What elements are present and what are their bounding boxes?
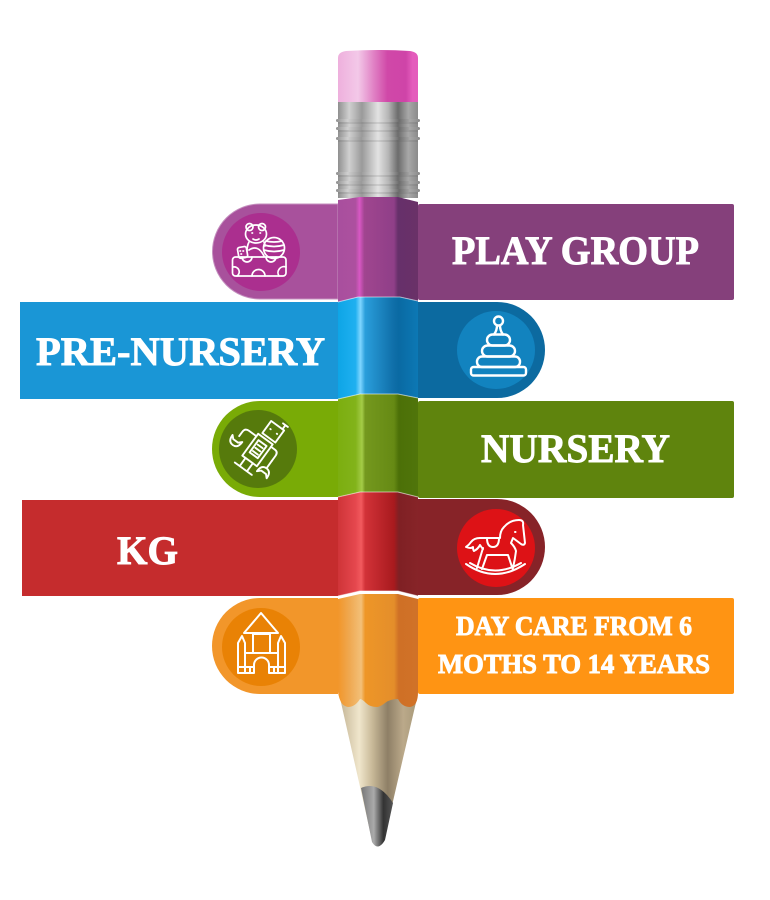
label: nursery: NURSERY — [481, 426, 670, 471]
label: pre-nursery: PRE-NURSERY — [36, 329, 325, 374]
icon: ring stacker — [457, 311, 535, 389]
pencil segment: red — [338, 492, 418, 596]
band: day care — [212, 598, 734, 694]
pencil segment: purple — [338, 197, 418, 302]
icon: toy castle — [222, 608, 300, 686]
pencil segment: orange — [338, 594, 418, 707]
tip wood — [340, 698, 417, 846]
pencil segment: green — [338, 394, 418, 497]
ferrule — [336, 102, 420, 198]
icon: rocking horse — [457, 509, 535, 587]
label: day care: DAY CARE FROM 6 — [456, 611, 692, 641]
pencil — [336, 50, 420, 847]
band: play group — [212, 204, 734, 300]
label: play group: PLAY GROUP — [452, 228, 699, 273]
icon: robot — [219, 403, 298, 488]
label: day care — [438, 611, 710, 679]
band: kg — [22, 499, 545, 596]
label: day care: MOTHS TO 14 YEARS — [438, 649, 710, 679]
band: nursery — [212, 401, 734, 498]
pencil segment: blue — [338, 297, 418, 399]
icon: teddy bear and toys — [222, 213, 300, 291]
label: kg: KG — [117, 528, 178, 573]
tip graphite — [361, 786, 393, 847]
eraser — [338, 50, 418, 103]
band: pre-nursery — [20, 302, 545, 399]
